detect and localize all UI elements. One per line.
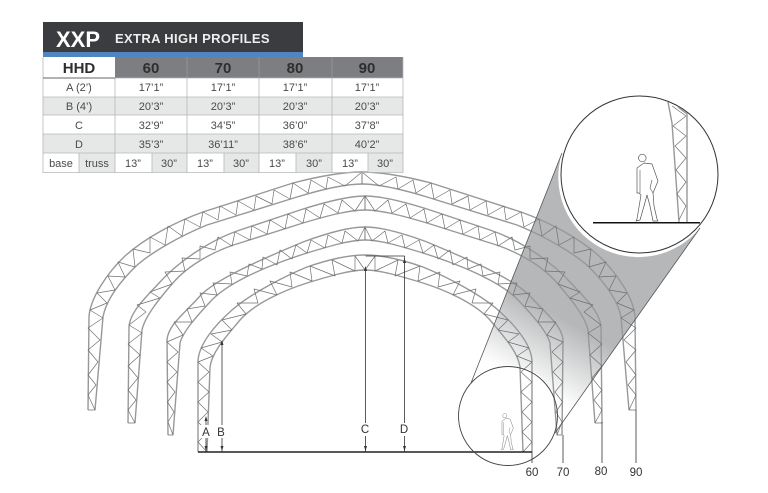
row C: 34’5” [211, 120, 236, 132]
row base and truss: 30” [233, 158, 249, 170]
small circle around the base with person [458, 366, 558, 466]
row B: 20’3” [283, 101, 308, 113]
row D: 40’2” [355, 139, 380, 151]
header row: 60 [143, 60, 159, 77]
row B [66, 101, 380, 113]
truss arch: HHD 90 [88, 172, 636, 410]
width leader lines and labels: 60 [526, 467, 538, 479]
row B: B (4’) [66, 101, 92, 113]
row B: 20’3” [355, 101, 380, 113]
table body shading and grid [43, 57, 403, 173]
header row: 90 [359, 60, 375, 77]
dimension lines with A, B, C, D labels: A [202, 427, 210, 439]
row base and truss: 13” [197, 158, 213, 170]
row C [75, 120, 380, 132]
magnified detail circle [561, 96, 718, 253]
row base and truss [49, 158, 393, 170]
magnified truss leg [668, 102, 687, 222]
width leader lines and labels: 70 [557, 467, 569, 479]
row base and truss: 30” [377, 158, 393, 170]
row base and truss: truss [85, 158, 109, 170]
header row: 80 [287, 60, 303, 77]
row base and truss: 30” [306, 158, 322, 170]
row D: 36’11” [208, 139, 238, 151]
row C: 36’0” [283, 120, 308, 132]
row base and truss: 13” [269, 158, 285, 170]
width leader lines and labels: 80 [595, 466, 607, 478]
row D [75, 139, 380, 151]
row D: 35’3” [139, 139, 164, 151]
row A [66, 82, 380, 94]
truss arch: HHD 60 [198, 255, 532, 452]
truss arch: HHD 70 [167, 227, 563, 435]
row C: C [75, 120, 83, 132]
row D: D [75, 139, 83, 151]
table title bar: XXP [56, 27, 100, 52]
row base and truss: 30” [161, 158, 177, 170]
row A: 17’1” [355, 82, 380, 94]
table title bar [43, 22, 303, 57]
row base and truss: 13” [342, 158, 358, 170]
dimension lines with A, B, C, D labels: B [217, 427, 225, 439]
row C: 32’9” [139, 120, 164, 132]
row A: 17’1” [139, 82, 164, 94]
dimension lines with A, B, C, D labels: D [400, 424, 408, 436]
row A: 17’1” [283, 82, 308, 94]
truss arch: HHD 80 [128, 196, 602, 423]
specification table [43, 57, 403, 173]
shaded magnification beam [471, 153, 700, 433]
width leader lines and labels [526, 410, 642, 479]
row D: 38’6” [283, 139, 308, 151]
dimension lines with A, B, C, D labels [198, 256, 532, 452]
row B: 20’3” [211, 101, 236, 113]
width leader lines and labels: 90 [630, 467, 642, 479]
row C: 37’8” [355, 120, 380, 132]
row base and truss: 13” [125, 158, 141, 170]
beam tangent lines [471, 153, 700, 433]
header row: HHD [63, 60, 95, 77]
row B: 20’3” [139, 101, 164, 113]
header row [43, 57, 403, 78]
dimension lines with A, B, C, D labels: C [361, 424, 369, 436]
row A: 17’1” [211, 82, 236, 94]
row A: A (2’) [66, 82, 92, 94]
table title bar: EXTRA HIGH PROFILES [115, 31, 270, 46]
row base and truss: base [49, 158, 73, 170]
ground line [593, 222, 700, 224]
magnified person [636, 154, 658, 221]
header row: 70 [215, 60, 231, 77]
